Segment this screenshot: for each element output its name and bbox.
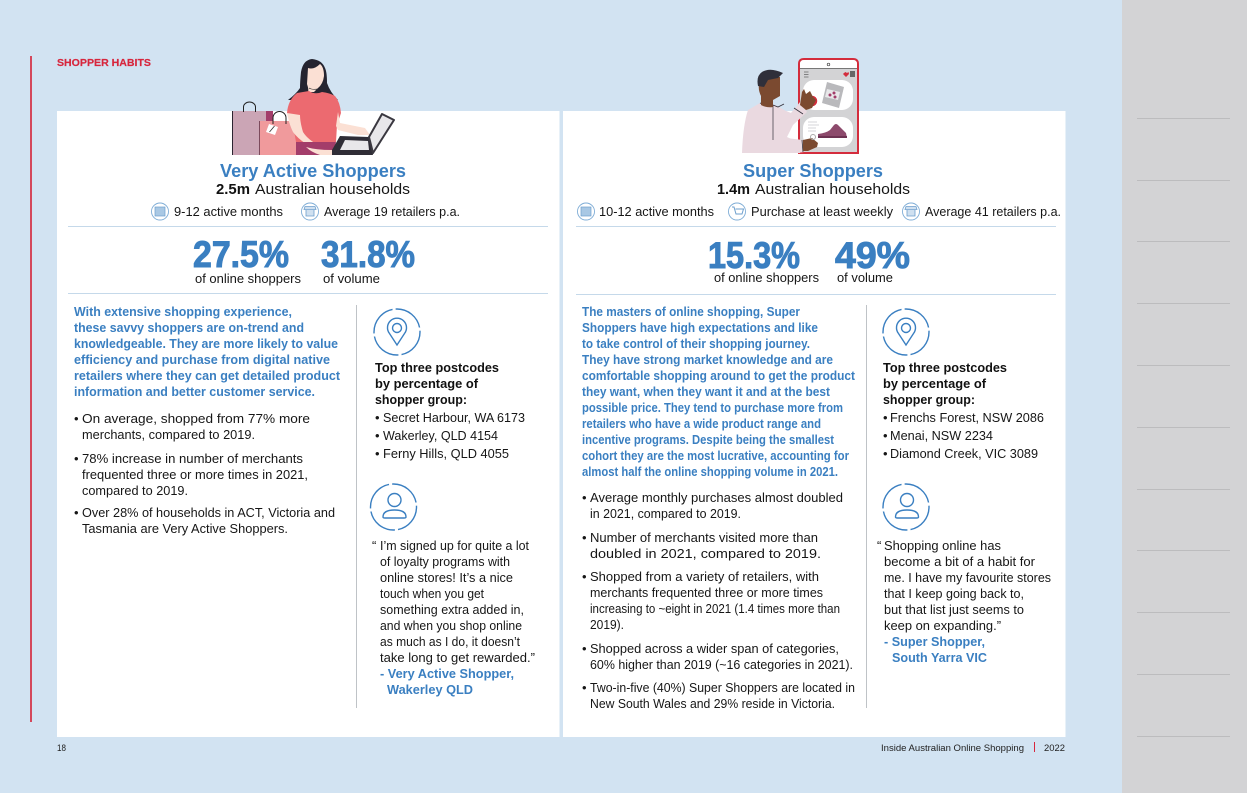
postcodes: • xyxy=(375,428,380,443)
quote: Shopping online has xyxy=(884,538,1001,553)
bullet list: frequented three or more times in 2021, xyxy=(82,467,308,482)
icon: person xyxy=(883,484,929,530)
postcodes: Secret Harbour, WA 6173 xyxy=(383,410,525,425)
bullet list: • xyxy=(74,505,79,520)
grey side panel xyxy=(1122,0,1247,793)
stat: online shoppers: 27.5% xyxy=(193,234,289,275)
bullet list: Shopped across a wider span of categories, xyxy=(590,641,839,656)
bullet list: • xyxy=(582,530,587,545)
intro text: retailers who have a wide product range and xyxy=(582,417,821,431)
intro text: Shoppers have high expectations and like xyxy=(582,321,818,335)
illustration: woman shopping on laptop xyxy=(232,59,394,155)
quote: South Yarra VIC xyxy=(892,651,987,665)
bullet list: • xyxy=(74,411,79,426)
heading: Very Active Shoppers xyxy=(220,160,406,181)
stat: online shoppers: of online shoppers xyxy=(714,270,819,285)
households: Australian households xyxy=(255,181,410,198)
footer: publication title: 2022 xyxy=(1044,743,1065,754)
stat: online shoppers: of online shoppers xyxy=(195,271,301,286)
icon: location pin xyxy=(883,309,929,355)
bullet list: compared to 2019. xyxy=(82,483,188,498)
stat: volume: 49% xyxy=(835,235,910,276)
quote xyxy=(372,538,535,697)
bullet list: 78% increase in number of merchants xyxy=(82,451,303,466)
quote: something extra added in, xyxy=(380,602,524,617)
bullet list: • xyxy=(582,641,587,656)
postcodes: Frenchs Forest, NSW 2086 xyxy=(890,410,1044,425)
panel: super shoppers xyxy=(563,59,1066,737)
quote: take long to get rewarded.” xyxy=(380,650,535,665)
illustration: man with tablet xyxy=(742,59,858,153)
bullet list: Two-in-five (40%) Super Shoppers are located in xyxy=(590,680,855,695)
postcodes: Ferny Hills, QLD 4055 xyxy=(383,446,509,461)
postcodes: Top three postcodes xyxy=(883,361,1007,375)
bullet list: • xyxy=(582,680,587,695)
section label: SHOPPER HABITS xyxy=(57,57,151,69)
quote: I’m signed up for quite a lot xyxy=(380,538,529,553)
heading: Super Shoppers xyxy=(743,160,883,181)
intro text: They have strong market knowledge and are xyxy=(582,353,833,367)
bullet list: Tasmania are Very Active Shoppers. xyxy=(82,521,288,536)
intro text: retailers where they can get detailed product xyxy=(74,369,341,383)
quote: and when you shop online xyxy=(380,618,522,633)
intro text: knowledgeable. They are more likely to value xyxy=(74,337,338,351)
bullet list: Number of merchants visited more than xyxy=(590,530,818,545)
intro text: information and better customer service. xyxy=(74,385,315,399)
footer: page number: 18 xyxy=(57,743,66,754)
bullet list: increasing to ~eight in 2021 (1.4 times more than xyxy=(590,601,840,616)
intro text xyxy=(74,305,341,399)
intro text: to take control of their shopping journey. xyxy=(582,337,810,351)
bullet list: merchants, compared to 2019. xyxy=(82,427,255,442)
quote: of loyalty programs with xyxy=(380,554,510,569)
intro text: comfortable shopping around to get the product xyxy=(582,369,856,383)
postcodes: Diamond Creek, VIC 3089 xyxy=(890,446,1038,461)
intro text: With extensive shopping experience, xyxy=(74,305,292,319)
purchase weekly: Purchase at least weekly xyxy=(751,204,893,219)
postcodes: • xyxy=(375,446,380,461)
intro text: almost half the online shopping volume in 2021. xyxy=(582,465,838,479)
quote: but that list just seems to xyxy=(884,602,1024,617)
quote: as much as I do, it doesn’t xyxy=(380,634,520,649)
active months: 9-12 active months xyxy=(174,204,283,219)
bullet list: merchants frequented three or more times xyxy=(590,585,823,600)
households: Australian households xyxy=(755,181,910,198)
retailers: Average 41 retailers p.a. xyxy=(925,204,1061,219)
bullet list: • xyxy=(582,490,587,505)
bullet list: Shopped from a variety of retailers, with xyxy=(590,569,819,584)
quote: become a bit of a habit for xyxy=(884,554,1036,569)
red margin rule xyxy=(30,56,32,722)
intro text: they want, when they want it and at the best xyxy=(582,385,831,399)
postcodes: Wakerley, QLD 4154 xyxy=(383,428,498,443)
households: 2.5m xyxy=(216,181,250,198)
intro text: these savvy shoppers are on-trend and xyxy=(74,321,304,335)
postcodes: shopper group: xyxy=(375,393,467,407)
panel: very active shoppers xyxy=(57,59,560,737)
quote: touch when you get xyxy=(380,586,484,601)
retailers: Average 19 retailers p.a. xyxy=(324,204,460,219)
bullet list: • xyxy=(74,451,79,466)
icon: person xyxy=(370,484,416,530)
postcodes: shopper group: xyxy=(883,393,975,407)
bullet list: New South Wales and 29% reside in Victoria. xyxy=(590,696,835,711)
stat: volume: of volume xyxy=(323,271,380,286)
households: 1.4m xyxy=(717,181,750,198)
intro text: possible price. They tend to purchase more from xyxy=(582,401,843,415)
bullet list: in 2021, compared to 2019. xyxy=(590,506,741,521)
quote: - Super Shopper, xyxy=(884,635,985,649)
quote: Wakerley QLD xyxy=(387,683,473,697)
postcodes: • xyxy=(375,410,380,425)
stat: online shoppers: 15.3% xyxy=(708,235,800,276)
bullet list: Over 28% of households in ACT, Victoria and xyxy=(82,505,335,520)
bullet list xyxy=(582,490,855,711)
postcodes: Top three postcodes xyxy=(375,361,499,375)
stat: volume: of volume xyxy=(837,270,893,285)
bullet list: doubled in 2021, compared to 2019. xyxy=(590,546,821,561)
postcodes: • xyxy=(883,410,888,425)
icon: location pin xyxy=(374,309,420,355)
intro text: efficiency and purchase from digital native xyxy=(74,353,330,367)
quote: “ xyxy=(372,538,376,553)
postcodes: • xyxy=(883,446,888,461)
active months: 10-12 active months xyxy=(599,204,714,219)
bullet list: Average monthly purchases almost doubled xyxy=(590,490,843,505)
postcodes: by percentage of xyxy=(883,377,987,391)
bullet list: 2019). xyxy=(590,617,624,632)
stat: volume: 31.8% xyxy=(321,234,415,275)
bullet list xyxy=(74,411,335,536)
intro text: The masters of online shopping, Super xyxy=(582,305,800,319)
quote: that I keep going back to, xyxy=(884,586,1024,601)
quote: online stores! It’s a nice xyxy=(380,570,513,585)
quote: me. I have my favourite stores xyxy=(884,570,1051,585)
intro text: cohort they are the most lucrative, accounting for xyxy=(582,449,849,463)
intro text: incentive programs. Despite being the smallest xyxy=(582,433,835,447)
postcodes: by percentage of xyxy=(375,377,479,391)
quote: “ xyxy=(877,538,881,553)
intro text xyxy=(582,305,856,479)
bullet list: 60% higher than 2019 (~16 categories in 2021). xyxy=(590,657,853,672)
postcodes: • xyxy=(883,428,888,443)
quote xyxy=(877,538,1051,665)
bullet list: • xyxy=(582,569,587,584)
bullet list: On average, shopped from 77% more xyxy=(82,411,310,426)
quote: keep on expanding.” xyxy=(884,618,1001,633)
postcodes xyxy=(375,361,525,461)
postcodes xyxy=(883,361,1044,461)
footer: publication title: Inside Australian Online Shopping xyxy=(881,743,1024,754)
quote: - Very Active Shopper, xyxy=(380,667,514,681)
postcodes: Menai, NSW 2234 xyxy=(890,428,993,443)
